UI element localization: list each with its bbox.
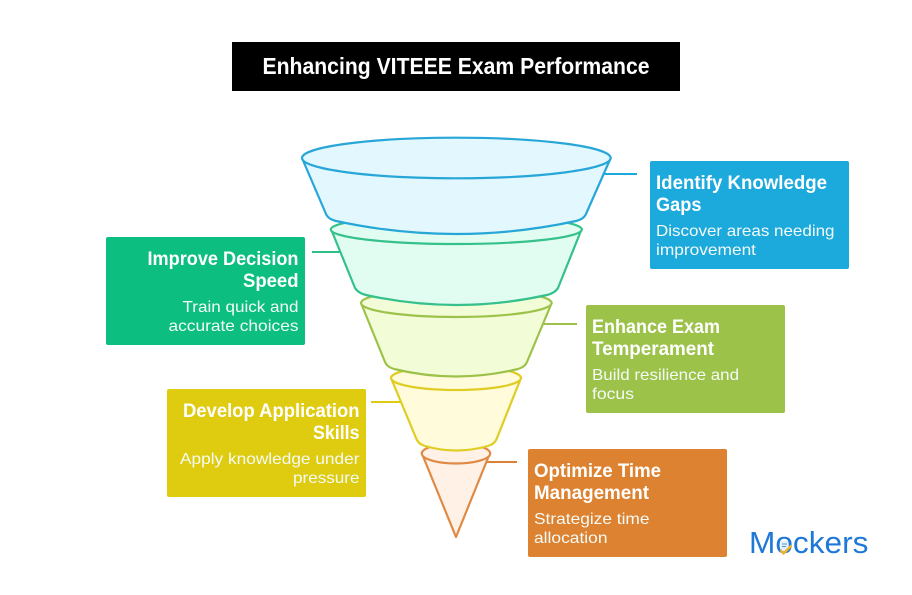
connector: enhance exam temperament [541,323,577,325]
description: Strategize time [534,511,650,528]
panel: optimize time management: allocation [534,530,608,547]
heading: Identify Knowledge [656,173,827,194]
description: Train quick and [182,299,298,316]
panel: identify knowledge gaps: Gaps [656,195,702,216]
panel: improve decision speed: accurate choices [168,318,298,335]
panel: improve decision speed: Speed [243,271,298,292]
panel: optimize time management [528,449,727,557]
panel: develop application skills: pressure [293,470,360,487]
funnel [302,138,611,537]
connector: develop application skills [371,401,403,403]
description: Apply knowledge under [180,451,360,468]
funnel tier: olive [361,289,552,376]
panel: develop application skills: Skills [313,423,360,444]
panel: enhance exam temperament: Temperament [592,339,715,360]
panel: optimize time management: Management [534,483,650,504]
connector: optimize time management [486,461,517,463]
funnel tier: blue top [302,138,611,234]
heading: Enhance Exam [592,317,720,338]
panel: identify knowledge gaps [650,161,849,269]
connector: identify knowledge gaps [604,173,637,175]
description: Build resilience and [592,367,739,384]
funnel tier: green [331,215,582,305]
icon: document with check mark [780,541,792,554]
heading: Develop Application [183,401,360,422]
description: Discover areas needing [656,223,834,240]
title: Enhancing VITEEE Exam Performance [262,53,650,79]
panel: develop application skills [167,389,366,497]
logo: Mockers: Mockers [749,525,868,560]
panel: enhance exam temperament: focus [592,386,634,403]
connector: improve decision speed [312,251,342,253]
panel: improve decision speed [106,237,305,345]
heading: Improve Decision [148,249,298,270]
funnel tier: yellow [391,366,521,450]
heading: Optimize Time [534,461,661,482]
panel: identify knowledge gaps: improvement [656,242,757,259]
title [232,42,680,91]
panel: enhance exam temperament [586,305,785,413]
funnel tier: orange tip [422,444,490,537]
